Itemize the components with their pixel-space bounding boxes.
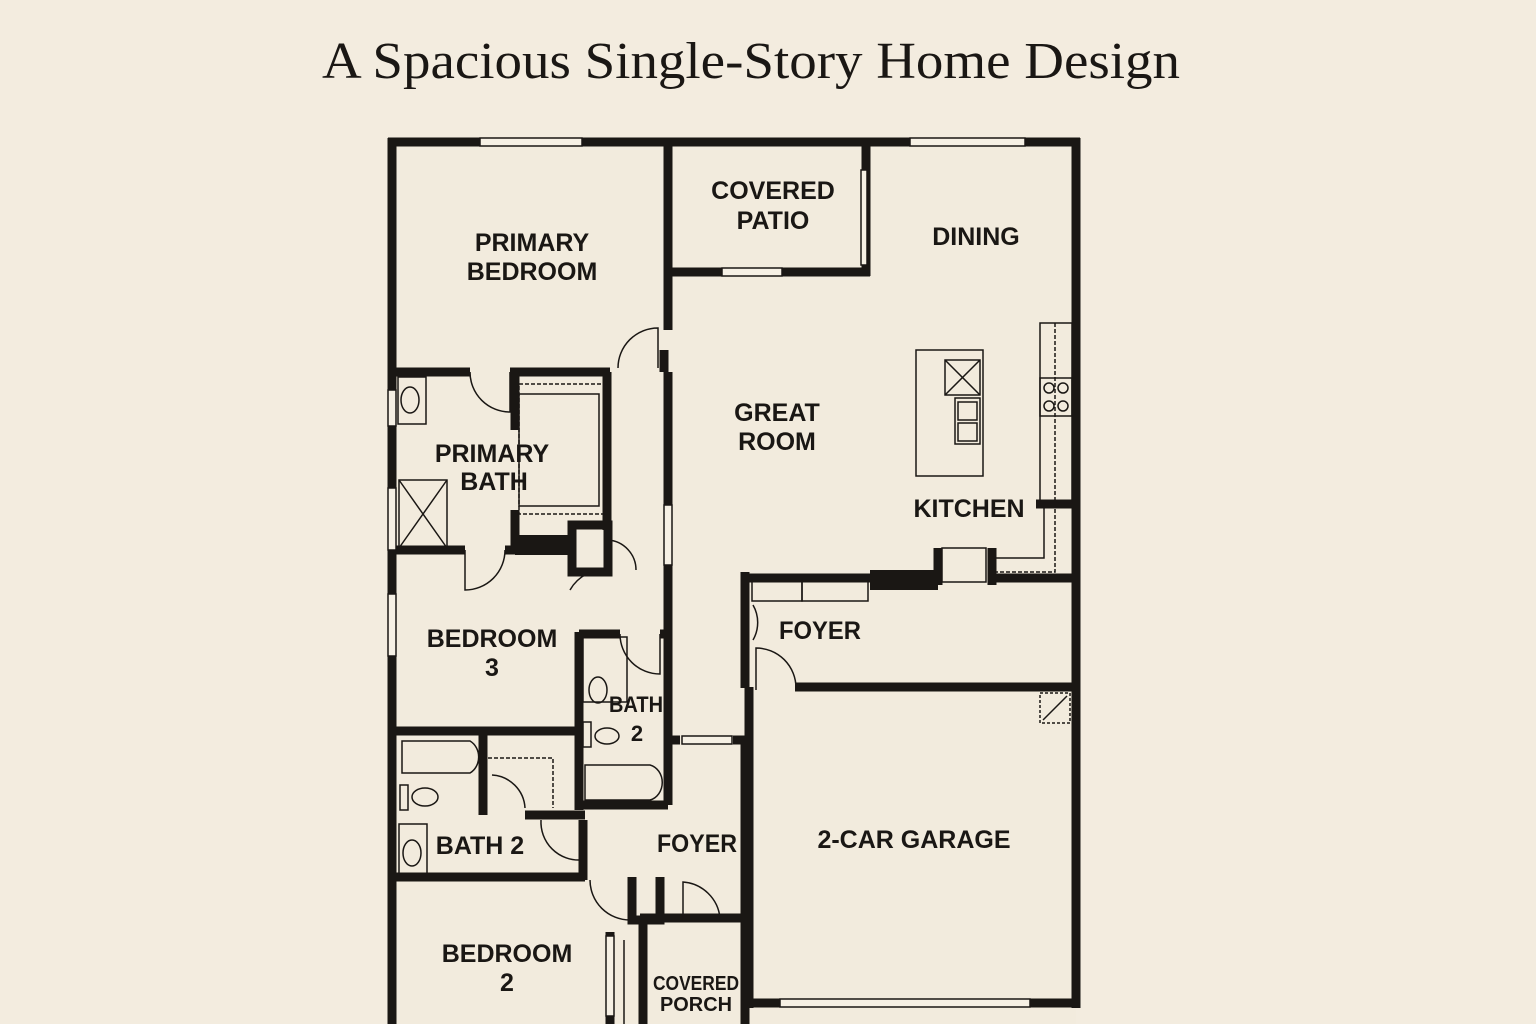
room labels: FOYER (657, 830, 737, 858)
fixtures (398, 323, 1072, 1024)
room labels: PORCH (660, 994, 732, 1016)
room labels: PATIO (737, 207, 809, 235)
room labels (427, 177, 1025, 1016)
room labels: BEDROOM (427, 625, 557, 653)
room labels: BEDROOM (467, 258, 597, 286)
room labels: COVERED (711, 177, 835, 205)
room labels: PRIMARY (435, 440, 550, 468)
room labels: BATH 2 (436, 832, 524, 860)
room labels: 2 (631, 721, 643, 746)
room labels: BATH (460, 468, 528, 496)
room labels: BATH (609, 692, 663, 717)
room labels: KITCHEN (913, 495, 1025, 523)
room labels: DINING (932, 223, 1020, 251)
room labels: 3 (485, 654, 499, 682)
room labels: PRIMARY (475, 229, 590, 257)
room labels: BEDROOM (442, 940, 572, 968)
room labels: ROOM (738, 428, 816, 456)
room labels: GREAT (734, 399, 820, 427)
floor plan (388, 138, 1080, 1024)
room labels: 2 (500, 969, 514, 997)
room labels: FOYER (779, 617, 861, 645)
room labels: COVERED (653, 973, 739, 995)
title: A Spacious Single-Story Home Design (322, 33, 1180, 90)
room labels: 2-CAR GARAGE (817, 826, 1011, 854)
windows (388, 138, 1030, 1016)
